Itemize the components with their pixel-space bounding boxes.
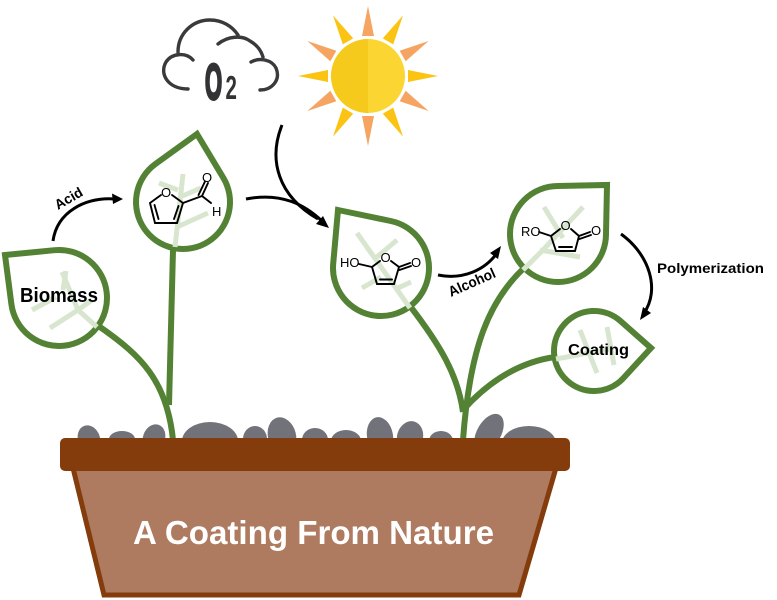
arrow: alcohol step: [438, 246, 501, 276]
sun disc: [331, 39, 405, 113]
icon: oxygen cloud: 2: [226, 69, 237, 106]
leaf: alkoxy furanone: [510, 185, 607, 282]
label: Acid: Acid: [52, 184, 85, 213]
molecule: furfural: H: [212, 204, 221, 219]
leaf: coating: [554, 311, 651, 391]
molecule: 5-hydroxy-2(5H)-furanone: O: [411, 255, 421, 270]
pot title: A Coating From Nature: [133, 514, 494, 551]
leaf veins: [556, 327, 614, 373]
leaf veins: [523, 207, 583, 270]
pot body: [73, 468, 556, 595]
plant pot: [60, 438, 570, 595]
molecule: 5-alkoxy-2(5H)-furanone: [521, 218, 601, 251]
molecule: 5-alkoxy-2(5H)-furanone: RO: [521, 224, 540, 239]
molecule: 5-hydroxy-2(5H)-furanone: [340, 250, 421, 284]
arrow: polymerization step: [621, 234, 652, 320]
molecule: 5-hydroxy-2(5H)-furanone: HO: [340, 255, 360, 270]
molecule: 5-alkoxy-2(5H)-furanone: O: [591, 223, 601, 238]
icon: sun: [298, 6, 438, 146]
leaf veins: [32, 271, 97, 328]
leaf veins: [357, 233, 411, 308]
label: Polymerization: Polymerization: [657, 260, 764, 276]
molecule: 5-hydroxy-2(5H)-furanone: O: [380, 250, 391, 265]
molecule: furfural: O: [202, 170, 212, 185]
arrow: biomass to furfural: [53, 194, 123, 241]
leaf: furfural: [136, 134, 230, 249]
arrow: oxygen and sunlight input: [276, 125, 318, 219]
sun rays: [298, 6, 438, 146]
molecule: furfural: O: [161, 185, 171, 200]
label: Alcohol: Alcohol: [446, 266, 498, 301]
plant stems: [100, 250, 555, 440]
leaf: hydroxy furanone: [333, 210, 429, 316]
leaf: biomass: [5, 250, 107, 346]
molecule: furfural: [150, 170, 221, 223]
label: Coating: Coating: [568, 342, 629, 359]
stones: [74, 409, 556, 460]
icon: oxygen cloud: O: [205, 55, 222, 111]
molecule: 5-alkoxy-2(5H)-furanone: O: [560, 218, 571, 233]
pot rim: [60, 438, 570, 471]
arrow: furfural to furanone: [246, 197, 329, 228]
icon: oxygen cloud: [164, 20, 277, 111]
label: Biomass: Biomass: [20, 285, 98, 307]
leaf veins: [159, 174, 208, 247]
